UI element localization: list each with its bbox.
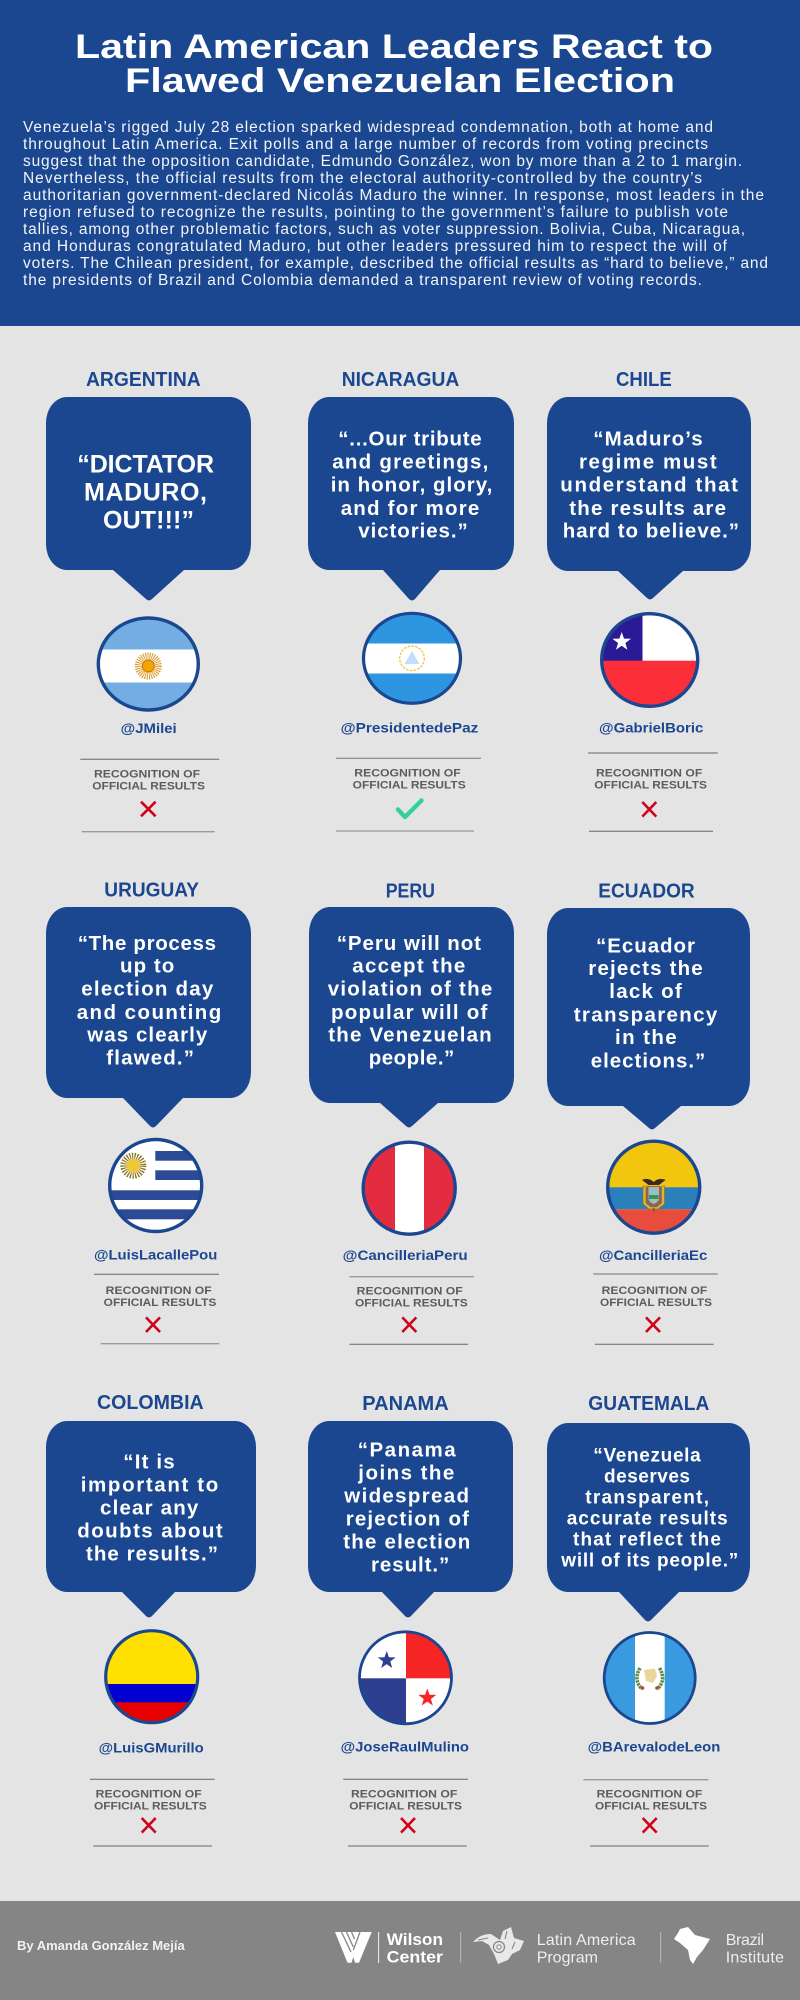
- recognition label: Uruguay: [104, 1285, 216, 1309]
- handle: Argentina: @JMilei: [121, 720, 177, 736]
- quote: Peru: people.”: [369, 1046, 454, 1069]
- speech bubble: Nicaragua: [308, 397, 514, 600]
- recognition label: Nicaragua: OFFICIAL RESULTS: [353, 780, 466, 792]
- quote: Nicaragua: “...Our tribute: [338, 428, 482, 451]
- logo: Latin America Program: [473, 1927, 636, 1967]
- icon: bird glyph: [473, 1927, 524, 1964]
- handle: Nicaragua: @PresidentedePaz: [341, 719, 478, 735]
- icon: Nicaragua flag: [362, 612, 462, 705]
- icon: Ecuador flag: [606, 1140, 702, 1235]
- intro text block: and Honduras congratulated Maduro, but other leaders pressured him to respect the will of: [23, 238, 728, 255]
- quote: Uruguay: and counting: [77, 1001, 221, 1024]
- quote: Panama: [343, 1439, 470, 1576]
- heading: Colombia: COLOMBIA: [97, 1392, 204, 1414]
- quote: Peru: accept the: [352, 955, 465, 978]
- quote: Panama: widespread: [343, 1484, 469, 1507]
- panel: Nicaragua: [308, 369, 514, 831]
- heading: Ecuador: ECUADOR: [598, 881, 695, 903]
- heading: Guatemala: GUATEMALA: [588, 1393, 709, 1415]
- quote: Argentina: [77, 451, 214, 534]
- intro text block: tallies, among other problematic factors, such as voter suppression. Bolivia, Cuba, Nicaragua,: [23, 221, 745, 238]
- icon: red cross: [141, 802, 156, 816]
- recognition label: Nicaragua: [353, 768, 466, 792]
- handle: Panama: @JoseRaulMulino: [341, 1738, 469, 1754]
- quote: Nicaragua: victories.”: [358, 520, 468, 543]
- logo: Brazil Institute: Brazil: [726, 1932, 764, 1949]
- intro text block: suggest that the opposition candidate, Edmundo González, won by more than a 2 to 1 margin.: [23, 153, 742, 170]
- header panel: [0, 0, 800, 326]
- recognition label: Panama: [349, 1788, 462, 1812]
- quote: Guatemala: [560, 1446, 738, 1572]
- quote: Guatemala: accurate results: [567, 1509, 728, 1530]
- icon: Uruguay flag: [108, 1138, 204, 1234]
- quote: Nicaragua: and greetings,: [332, 450, 488, 473]
- icon: Guatemala flag: [602, 1631, 697, 1725]
- title: Latin American Leaders React to: [75, 28, 713, 66]
- quote: Chile: [560, 428, 739, 543]
- speech bubble: Guatemala: [547, 1423, 750, 1622]
- recognition label: Nicaragua: RECOGNITION OF: [354, 768, 461, 780]
- logo: Latin America Program: Latin America: [537, 1932, 636, 1949]
- recognition label: Chile: OFFICIAL RESULTS: [594, 780, 707, 792]
- handle: Colombia: @LuisGMurillo: [99, 1739, 204, 1755]
- handle: Uruguay: @LuisLacallePou: [94, 1246, 217, 1262]
- quote: Guatemala: transparent,: [585, 1488, 709, 1509]
- recognition label: Colombia: OFFICIAL RESULTS: [94, 1800, 207, 1812]
- quote: Ecuador: in the: [615, 1026, 677, 1049]
- recognition label: Peru: [355, 1285, 468, 1309]
- quote: Nicaragua: and for more: [341, 497, 479, 520]
- intro text block: throughout Latin America. Exit polls and a large number of records from voting precincts: [23, 136, 708, 153]
- recognition label: Colombia: [94, 1788, 207, 1812]
- footer panel: [0, 1901, 800, 2000]
- quote: Guatemala: “Venezuela: [593, 1446, 701, 1467]
- handle: Ecuador: @CancilleriaEc: [599, 1247, 708, 1263]
- recognition label: Ecuador: [600, 1285, 712, 1309]
- heading: Nicaragua: NICARAGUA: [342, 369, 459, 391]
- icon: red cross: [401, 1818, 415, 1833]
- heading: Peru: PERU: [386, 881, 435, 903]
- quote: Chile: the results are: [569, 497, 726, 520]
- heading: Argentina: ARGENTINA: [86, 369, 201, 391]
- icon: red cross: [642, 802, 656, 817]
- speech bubble: Colombia: [46, 1421, 256, 1618]
- quote: Panama: the election: [343, 1530, 470, 1553]
- quote: Guatemala: that reflect the: [573, 1530, 721, 1551]
- quote: Uruguay: up to: [120, 955, 174, 978]
- quote: Panama: joins the: [357, 1461, 454, 1484]
- intro text block: Venezuela’s rigged July 28 election sparked widespread condemnation, both at home and: [23, 119, 713, 136]
- panel: Argentina: [46, 369, 251, 832]
- speech bubble: Uruguay: [46, 907, 251, 1128]
- recognition label: Ecuador: RECOGNITION OF: [602, 1285, 708, 1297]
- panel: Guatemala: [547, 1393, 750, 1846]
- logo: Wilson Center: Center: [387, 1948, 443, 1967]
- quote: Peru: violation of the: [328, 978, 492, 1001]
- recognition label: Chile: [594, 768, 707, 792]
- handle: Guatemala: @BArevalodeLeon: [588, 1738, 720, 1754]
- intro text block: authoritarian government-declared Nicolás Maduro the winner. In response, most leaders in the: [23, 187, 764, 204]
- speech bubble: Ecuador: [547, 908, 750, 1130]
- quote: Uruguay: flawed.”: [106, 1046, 194, 1069]
- recognition label: Uruguay: OFFICIAL RESULTS: [104, 1297, 216, 1309]
- byline: By Amanda González Mejía: [17, 1939, 186, 1953]
- icon: red cross: [646, 1317, 660, 1332]
- quote: Chile: hard to believe.”: [563, 520, 739, 543]
- recognition label: Panama: OFFICIAL RESULTS: [349, 1800, 462, 1812]
- icon: Chile flag: [600, 610, 700, 711]
- panel: Colombia: [46, 1392, 256, 1846]
- handle: Peru: @CancilleriaPeru: [343, 1247, 468, 1263]
- quote: Peru: [328, 932, 492, 1069]
- logo: Latin America Program: Program: [537, 1950, 598, 1967]
- quote: Ecuador: elections.”: [591, 1049, 705, 1072]
- quote: Nicaragua: [331, 428, 492, 543]
- quote: Nicaragua: in honor, glory,: [331, 474, 492, 497]
- icon: green check: [398, 800, 422, 817]
- recognition label: Peru: OFFICIAL RESULTS: [355, 1297, 468, 1309]
- quote: Colombia: clear any: [100, 1496, 199, 1519]
- recognition label: Panama: RECOGNITION OF: [351, 1788, 458, 1800]
- quote: Ecuador: transparency: [574, 1003, 718, 1026]
- speech bubble: Panama: [308, 1421, 513, 1618]
- title: [75, 28, 713, 100]
- quote: Chile: understand that: [560, 474, 738, 497]
- quote: Ecuador: rejects the: [588, 957, 703, 980]
- panel: Chile: [547, 369, 751, 831]
- quote: Chile: “Maduro’s: [593, 428, 703, 451]
- icon: red cross: [146, 1317, 160, 1332]
- icon: Panama flag: [356, 1628, 456, 1728]
- recognition label: Chile: RECOGNITION OF: [596, 768, 703, 780]
- icon: Peru flag: [360, 1138, 460, 1238]
- icon: red cross: [402, 1317, 416, 1332]
- logo: Brazil Institute: [674, 1927, 784, 1967]
- logo: Wilson Center: [335, 1930, 443, 1967]
- recognition label: Guatemala: RECOGNITION OF: [597, 1789, 703, 1801]
- quote: Uruguay: was clearly: [86, 1024, 208, 1047]
- logo: Wilson Center: Wilson: [387, 1930, 443, 1949]
- recognition label: Argentina: RECOGNITION OF: [94, 768, 200, 780]
- quote: Colombia: [77, 1450, 223, 1565]
- quote: Argentina: OUT!!!”: [103, 506, 194, 534]
- quote: Ecuador: lack of: [609, 980, 682, 1003]
- quote: Colombia: important to: [81, 1474, 218, 1497]
- recognition label: Colombia: RECOGNITION OF: [96, 1788, 202, 1800]
- recognition label: Peru: RECOGNITION OF: [357, 1285, 463, 1297]
- quote: Peru: the Venezuelan: [328, 1024, 492, 1047]
- recognition label: Argentina: [92, 768, 205, 792]
- handle: Chile: @GabrielBoric: [599, 719, 704, 735]
- logo: Brazil Institute: Institute: [726, 1950, 784, 1967]
- quote: Argentina: MADURO,: [84, 479, 207, 507]
- icon: Brazil map: [674, 1927, 710, 1964]
- recognition label: Guatemala: [595, 1789, 707, 1813]
- recognition label: Guatemala: OFFICIAL RESULTS: [595, 1801, 707, 1813]
- quote: Uruguay: election day: [81, 978, 214, 1001]
- emblem detail: [642, 1179, 666, 1212]
- quote: Uruguay: “The process: [78, 932, 216, 955]
- intro text block: Nevertheless, the official results from the electoral authority-controlled by the country’s: [23, 170, 702, 187]
- panel: Uruguay: [46, 880, 251, 1344]
- quote: Colombia: doubts about: [77, 1519, 223, 1542]
- icon: red cross: [643, 1818, 657, 1833]
- intro text block: the presidents of Brazil and Colombia demanded a transparent review of voting records.: [23, 272, 702, 289]
- emblem detail: [637, 1668, 663, 1690]
- intro text block: [23, 119, 768, 289]
- speech bubble: Argentina: [46, 397, 251, 600]
- quote: Panama: rejection of: [346, 1507, 469, 1530]
- quote: Argentina: “DICTATOR: [77, 451, 214, 479]
- quote: Panama: result.”: [371, 1553, 449, 1576]
- quote: Guatemala: will of its people.”: [560, 1551, 738, 1572]
- quote: Colombia: “It is: [123, 1450, 175, 1473]
- quote: Peru: “Peru will not: [337, 932, 481, 955]
- quote: Ecuador: [574, 934, 718, 1072]
- quote: Colombia: the results.”: [86, 1542, 218, 1565]
- quote: Guatemala: deserves: [604, 1467, 690, 1488]
- quote: Panama: “Panama: [358, 1439, 456, 1462]
- recognition label: Ecuador: OFFICIAL RESULTS: [600, 1297, 712, 1309]
- speech bubble: Chile: [547, 397, 751, 600]
- speech bubble: Peru: [309, 907, 514, 1128]
- intro text block: voters. The Chilean president, for example, described the official results as “hard to believe,” and: [23, 255, 768, 272]
- quote: Chile: regime must: [579, 450, 717, 473]
- heading: Uruguay: URUGUAY: [104, 880, 200, 902]
- heading: Chile: CHILE: [616, 369, 672, 391]
- panel: Ecuador: [547, 881, 750, 1344]
- quote: Uruguay: [77, 932, 221, 1069]
- heading: Panama: PANAMA: [362, 1393, 449, 1415]
- quote: Ecuador: “Ecuador: [596, 934, 695, 957]
- panel: Panama: [308, 1393, 513, 1846]
- icon: Argentina flag: [95, 615, 205, 715]
- icon: red cross: [142, 1818, 156, 1833]
- quote: Peru: popular will of: [331, 1001, 487, 1024]
- icon: Colombia flag: [104, 1629, 200, 1724]
- recognition label: Argentina: OFFICIAL RESULTS: [92, 780, 205, 792]
- intro text block: region refused to recognize the results, pointing to the government’s failure to publish vote: [23, 204, 728, 221]
- title: Flawed Venezuelan Election: [125, 62, 675, 100]
- panel: Peru: [309, 881, 514, 1344]
- recognition label: Uruguay: RECOGNITION OF: [106, 1285, 212, 1297]
